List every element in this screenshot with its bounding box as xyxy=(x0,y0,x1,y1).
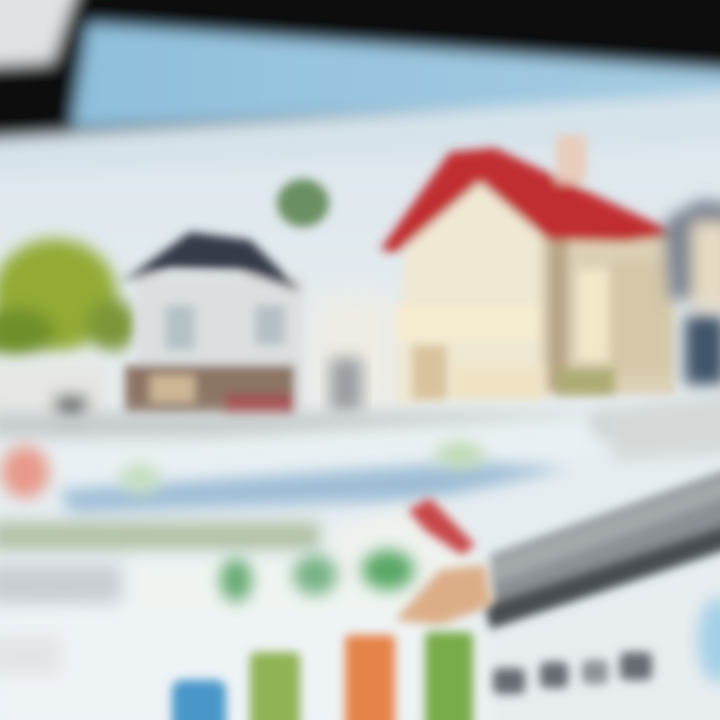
bar: dark green xyxy=(425,632,473,720)
panel: white document lower area xyxy=(0,500,720,720)
bar: orange xyxy=(345,635,395,720)
panel: top dark frame xyxy=(0,0,720,175)
tree: green foliage xyxy=(0,239,137,356)
bar chart xyxy=(172,632,473,720)
map: blue stripe xyxy=(0,462,570,550)
background: sky xyxy=(0,110,720,440)
icon: red map marker xyxy=(1,442,485,498)
bar: green xyxy=(250,652,300,720)
house: dark roof home xyxy=(122,232,305,417)
house: pale distant building xyxy=(315,295,395,410)
icons: green bubbles xyxy=(220,550,414,602)
text block: blurred numbers xyxy=(493,652,652,694)
house: large red roof home xyxy=(380,135,680,405)
icon: floating green circle xyxy=(277,179,329,227)
bar: blue xyxy=(172,680,226,720)
icon: blue corner shape xyxy=(698,598,720,682)
house: right edge home xyxy=(665,200,720,385)
house: distant doorway xyxy=(330,358,362,414)
panel: lower right gray ramp xyxy=(485,465,720,630)
icon: red roof and hand xyxy=(395,498,492,625)
house: small left building xyxy=(0,362,110,423)
ground: pale road band xyxy=(0,392,720,500)
